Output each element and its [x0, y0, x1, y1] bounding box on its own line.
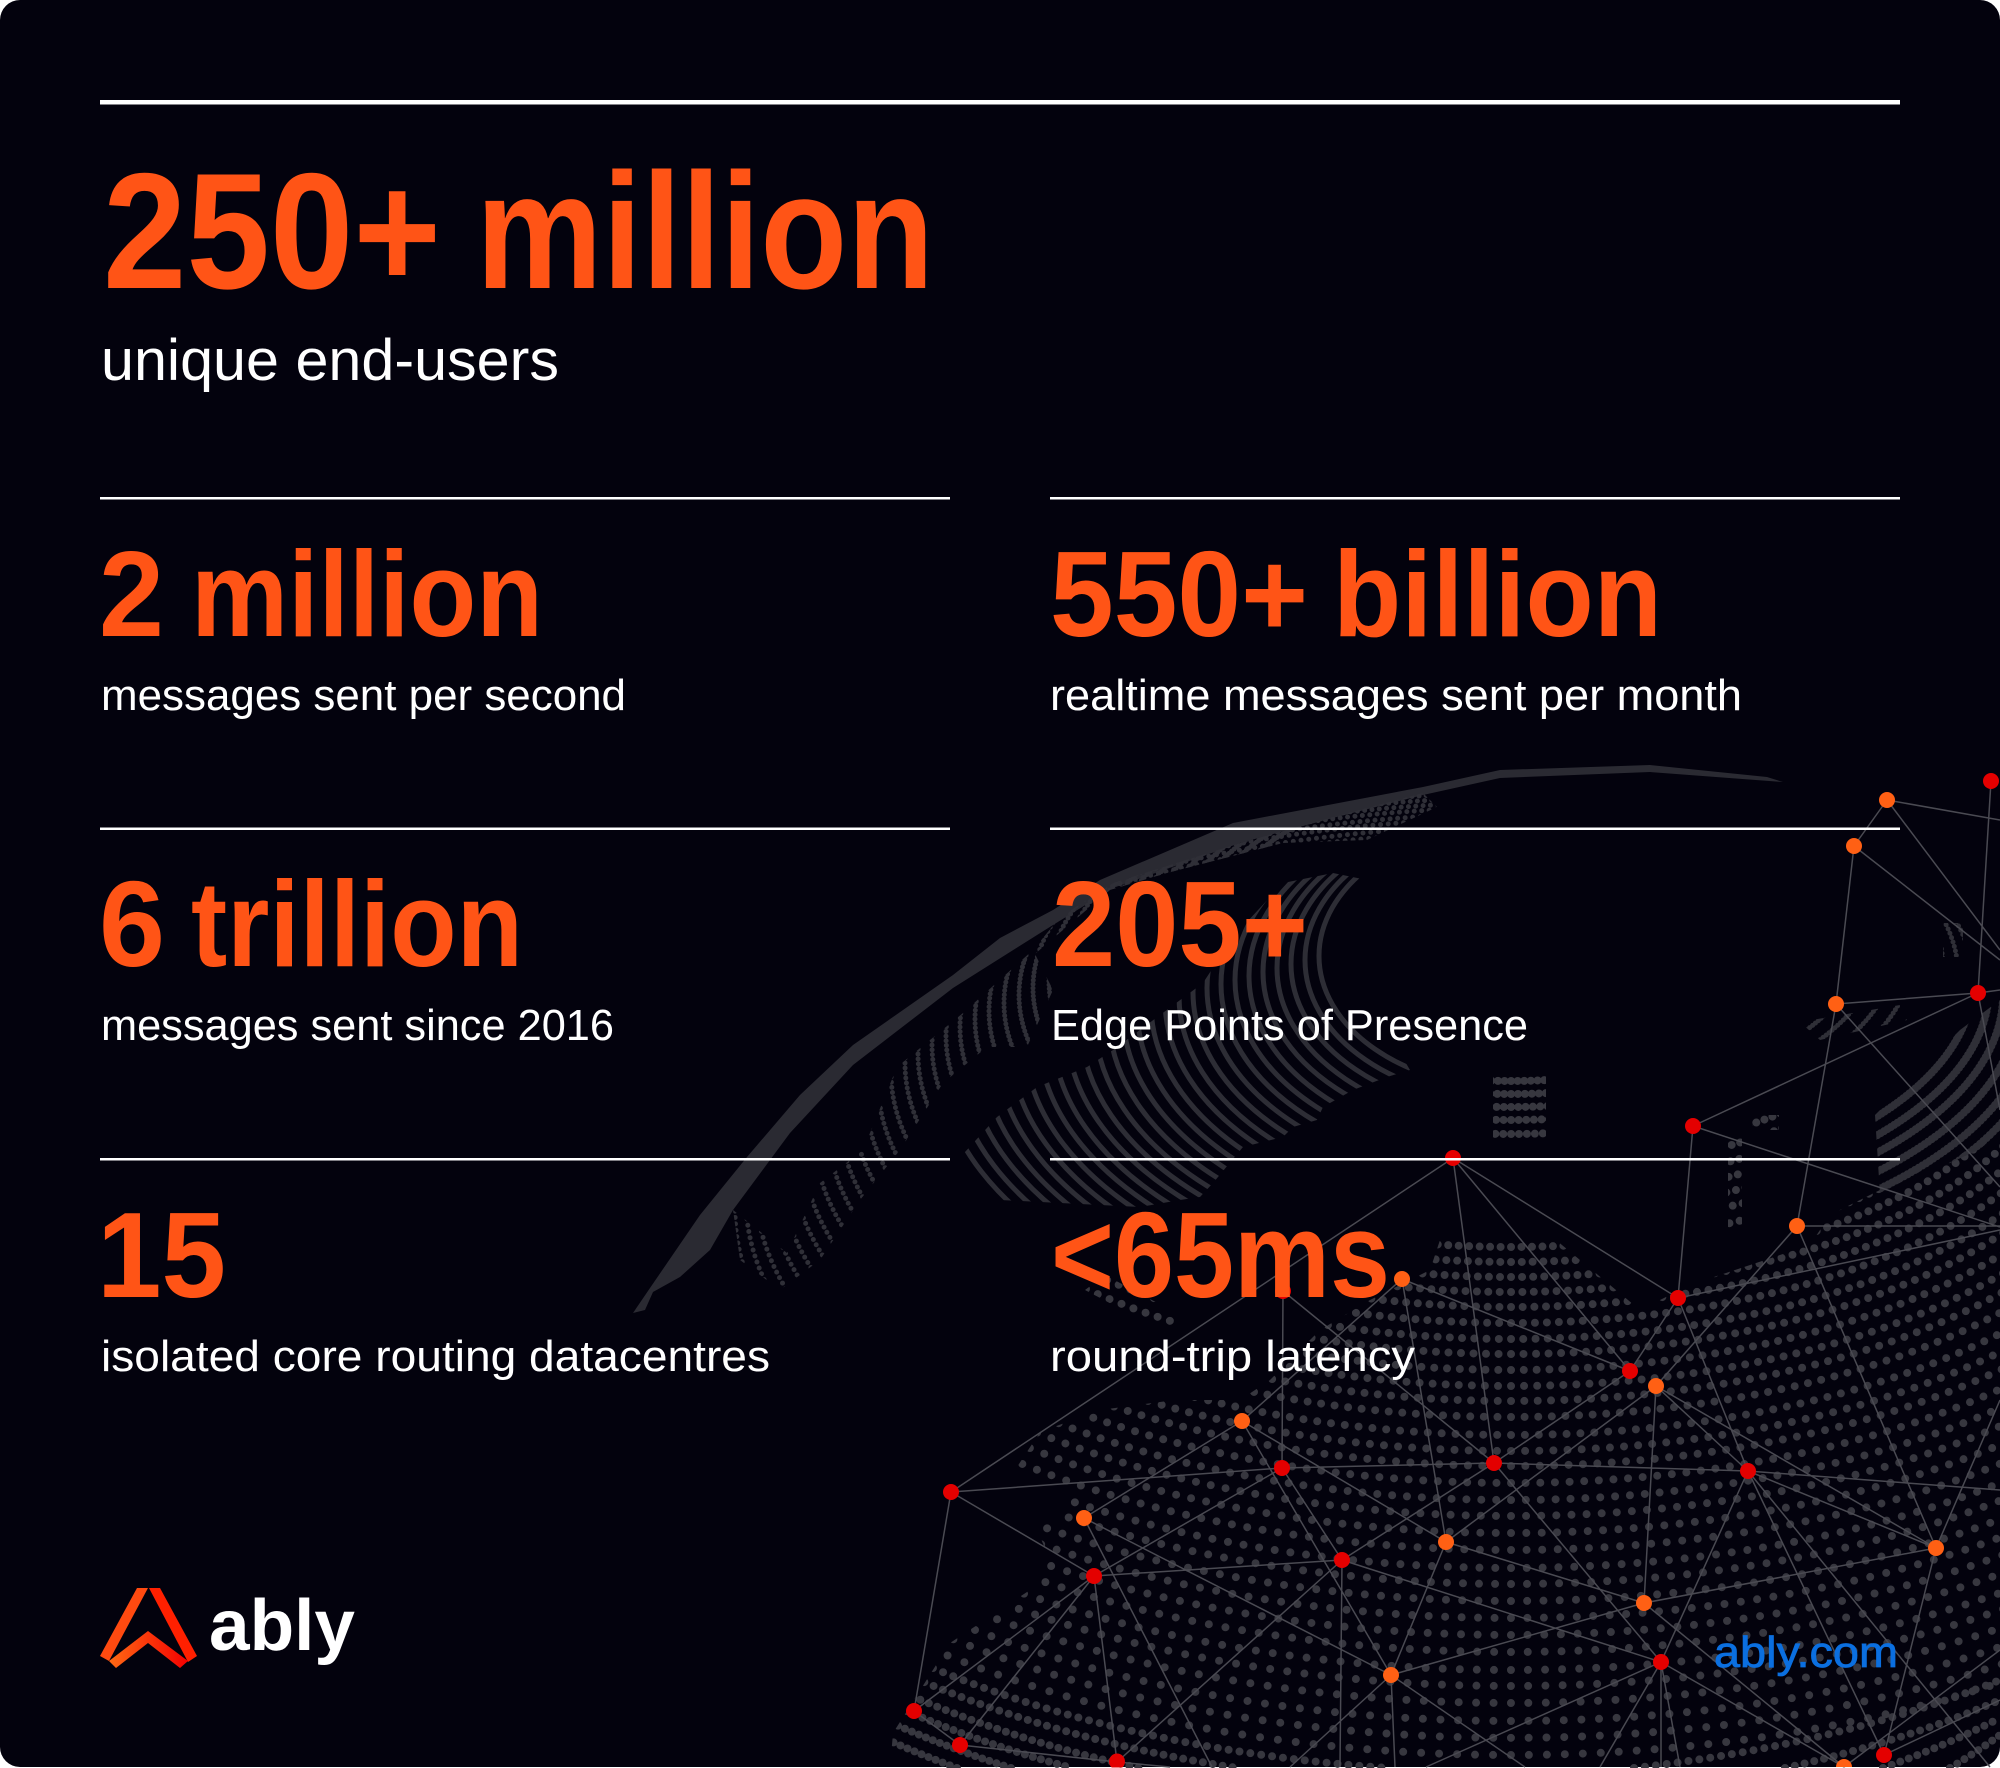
stat: 205+ edge points of presence	[1050, 828, 1900, 1050]
stat: 15 isolated core routing datacentres	[97, 1158, 950, 1381]
logo: ably	[100, 1586, 355, 1668]
network nodes: orange	[1076, 792, 1944, 1767]
label: messages sent per second: messages sent per second	[101, 671, 626, 720]
number: 550+ billion: billion	[1333, 526, 1662, 662]
network nodes: red	[906, 773, 1999, 1768]
link: ably.com: ably.com	[1714, 1628, 1898, 1677]
network lines	[914, 781, 2000, 1767]
number: 2 million: million	[191, 526, 543, 662]
stat: 6 trillion messages since 2016	[99, 828, 950, 1050]
stat: <65ms round-trip latency	[1050, 1158, 1900, 1381]
label: isolated core routing datacentres: isolated core routing datacentres	[101, 1332, 770, 1381]
number: 15: 15	[97, 1187, 226, 1323]
stat: 550+ billion realtime messages	[1050, 497, 1900, 720]
number: 250+ million	[103, 139, 934, 323]
globe: dotted world map	[598, 759, 2000, 1768]
number: 6 trillion: trillion	[191, 856, 523, 992]
icon: ably mark	[100, 1588, 197, 1668]
globe right dashes	[1875, 1000, 2000, 1192]
number: 205+: 205+	[1052, 856, 1308, 992]
stat: 250+ million unique end-users	[100, 100, 1900, 393]
label: Edge Points of Presence: Edge Points of Presence	[1051, 1001, 1528, 1050]
number: <65ms: <65ms	[1051, 1187, 1390, 1323]
stat: 2 million messages per second	[99, 497, 950, 720]
number: 550+ billion	[1050, 526, 1662, 662]
logo wordmark: ably	[209, 1586, 355, 1666]
globe front dot rows	[892, 1076, 2000, 1768]
label: unique end-users: unique end-users	[101, 328, 559, 393]
number: 6 trillion: 6	[99, 856, 165, 992]
label: messages sent since 2016: messages sent since 2016	[101, 1001, 614, 1050]
number: 2 million: 2	[99, 526, 164, 662]
number: 250+ million: million	[476, 139, 934, 323]
globe top scattered strips	[1021, 794, 1963, 1040]
number: 250+ million: 250+	[103, 139, 441, 323]
label: round-trip latency: round-trip latency	[1050, 1332, 1415, 1381]
number: 550+ billion: 550+	[1050, 526, 1308, 662]
globe limb crescent	[633, 765, 1783, 1313]
globe polar rings	[965, 873, 1410, 1207]
globe left dense strips	[733, 954, 1052, 1288]
label: realtime messages sent per month: realtime messages sent per month	[1050, 671, 1742, 720]
